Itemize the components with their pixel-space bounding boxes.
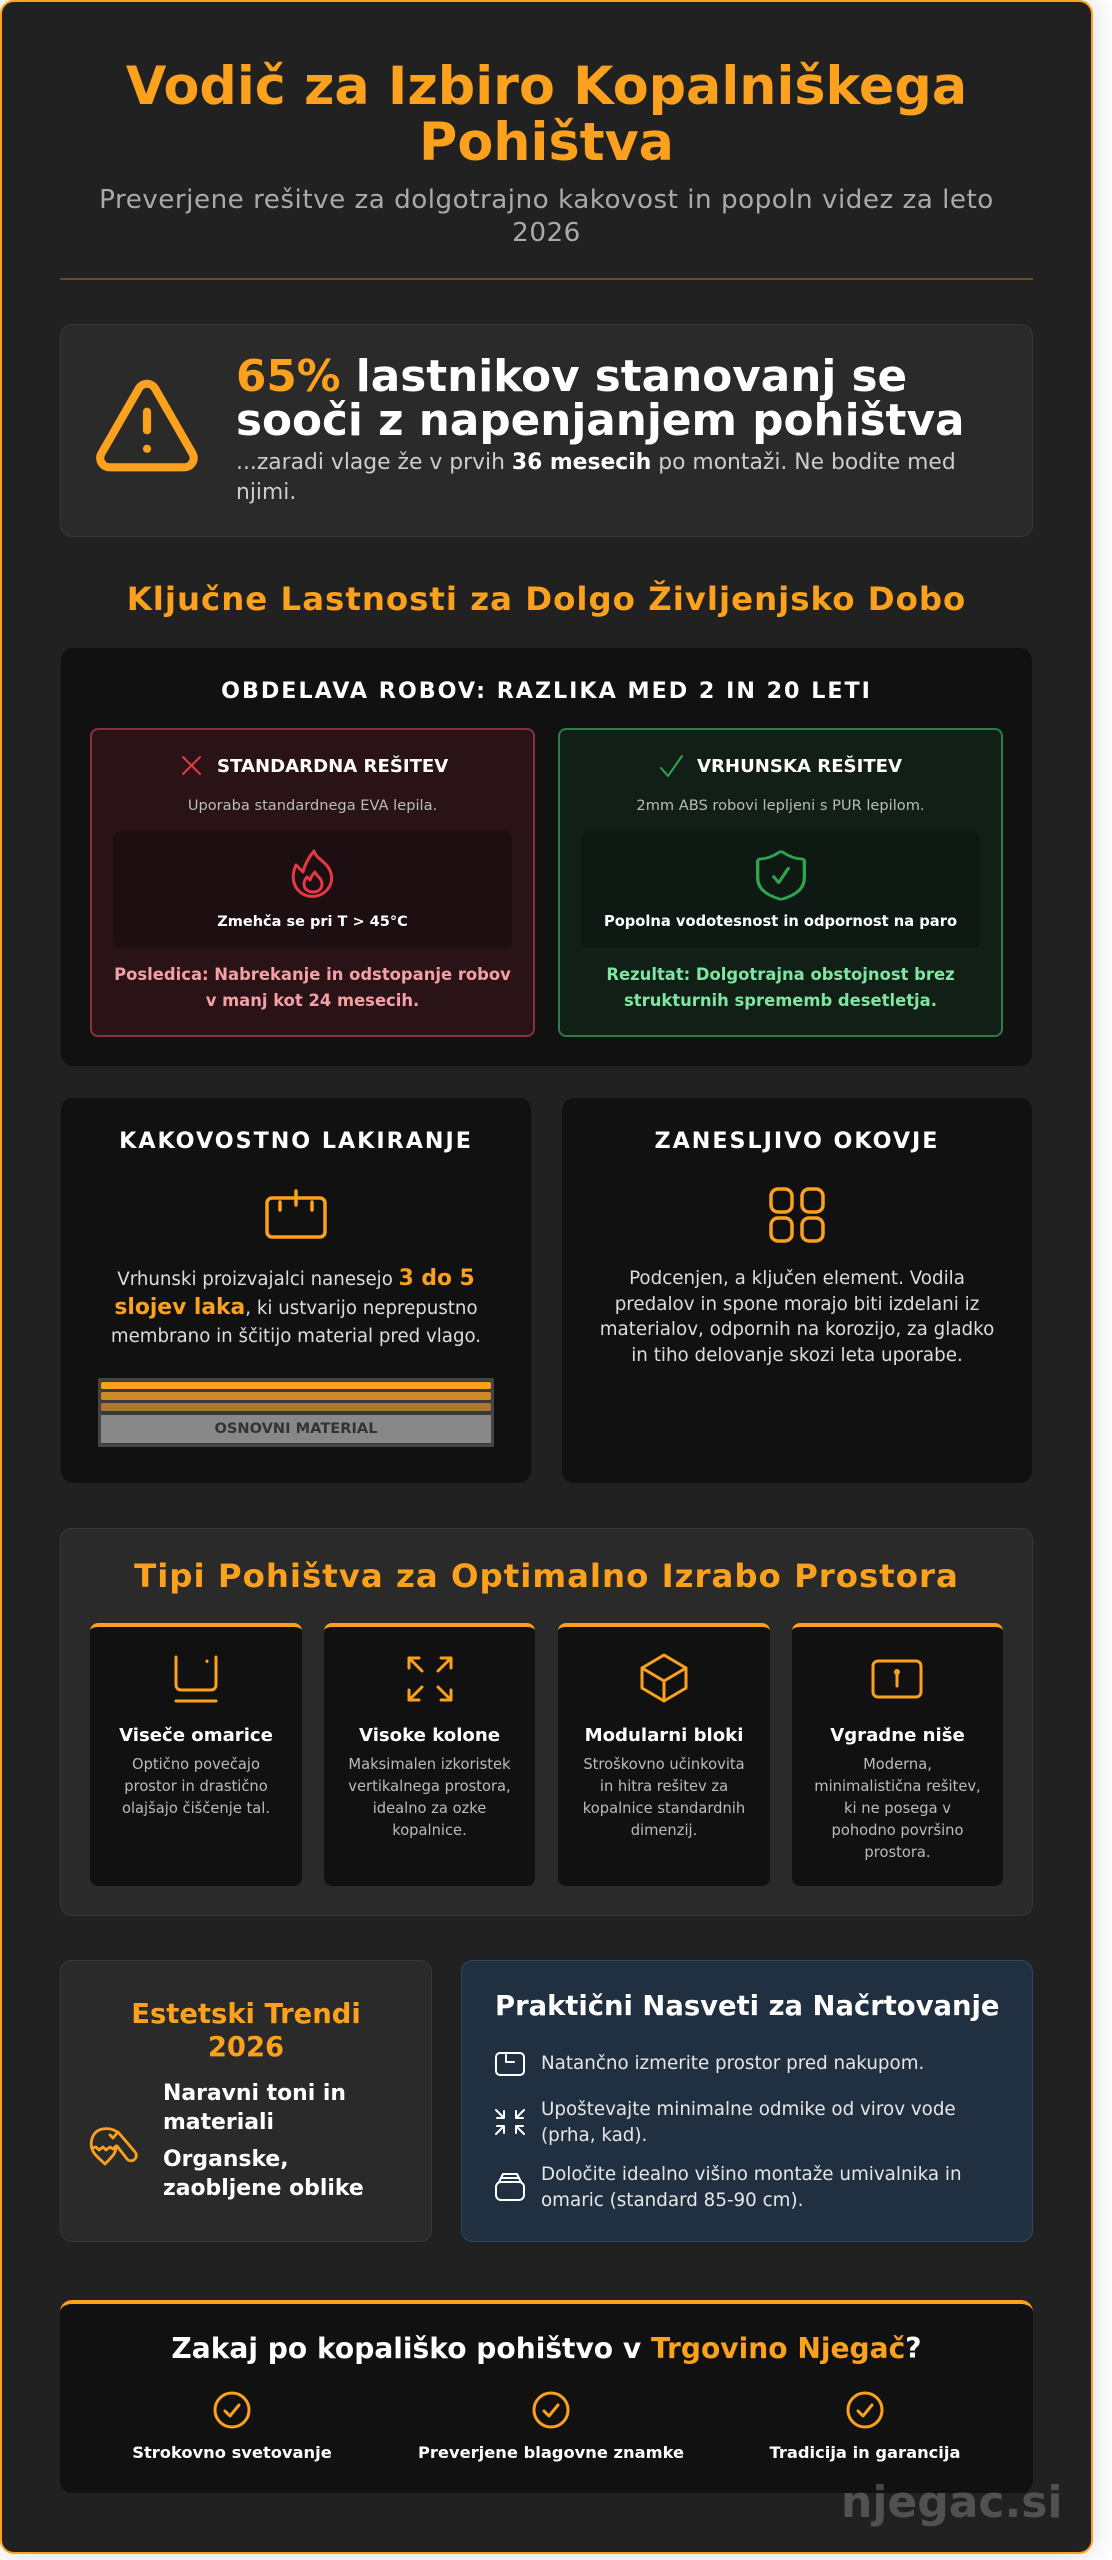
inner box: softening [113,831,512,948]
heading: furniture types: Tipi Pohištva za Optimalno Izrabo Prostora [134,1557,959,1595]
tall columns title: Visoke kolone [359,1725,500,1746]
tip 2: Upoštevajte minimalne odmike od virov vode [541,2099,956,2120]
benefit 2 [418,2392,684,2462]
title [126,56,967,173]
watermark: njegac.si [841,2477,1063,2528]
niches text: Moderna, [863,1756,932,1773]
heading: trends: Estetski Trendi [131,1999,361,2030]
tall columns text [348,1756,511,1839]
panel: lacquering [61,1098,531,1483]
title: Pohištva [419,112,674,173]
modular text: dimenzij. [631,1822,697,1839]
standard consequence [114,965,511,1010]
niches text: prostora. [864,1844,931,1861]
inner box: waterproof [581,831,980,948]
tip 3 [541,2164,962,2210]
hardware text [600,1268,994,1366]
heading: trends: 2026 [208,2032,284,2063]
icon: cube [640,1654,688,1702]
panel: trends [60,1960,432,2242]
icon: cross [182,756,201,775]
stat headline: 65% lastnikov stanovanj se [236,351,907,402]
hardware text: Podcenjen, a ključen element. Vodila [629,1268,965,1289]
icon: expand arrows [407,1656,453,1702]
heading: why us: Zakaj po kopališko pohištvo v Trgovino Njegač? [171,2332,922,2365]
hardware text: materialov, odpornih na korozijo, za gladko [600,1319,994,1340]
icon: check [660,755,683,777]
card: built-in niches [792,1623,1003,1886]
premium result: strukturnih sprememb desetletja. [624,991,937,1010]
card: modular blocks [558,1623,770,1886]
panel: hardware [562,1098,1032,1483]
base material: OSNOVNI MATERIAL [214,1420,378,1437]
card: wall cabinets [90,1623,302,1886]
stat headline: sooči z napenjanjem pohištva [236,395,964,446]
wall cabinet text: prostor in drastično [124,1778,268,1795]
icon: flame [292,849,334,898]
heading: planning tips: Praktični Nasveti za Načrtovanje [495,1991,999,2022]
tip 3: Določite idealno višino montaže umivalnika in [541,2164,962,2185]
waterproof caption: Popolna vodotesnost in odpornost na paro [604,913,957,930]
tip 3: omaric (standard 85-90 cm). [541,2190,803,2210]
tip 2: (prha, kad). [541,2124,647,2146]
icon: stacked cabinet [495,2173,525,2201]
niches text: pohodno površino [832,1822,963,1839]
modular text [583,1756,745,1839]
modular text: in hitra rešitev za [600,1778,728,1795]
wall cabinet text [122,1756,270,1817]
benefit label: Strokovno svetovanje [132,2443,332,2462]
tip 2 [541,2099,956,2146]
heading: trends [131,1999,361,2063]
tall columns text: vertikalnega prostora, [348,1778,511,1795]
icon: niche [872,1660,922,1698]
panel: why us [60,2300,1033,2493]
standard consequence: Posledica: Nabrekanje in odstopanje robov [114,965,511,984]
modular text: kopalnice standardnih [583,1800,745,1817]
wall cabinet title: Viseče omarice [119,1725,273,1746]
benefit label: Preverjene blagovne znamke [418,2443,684,2462]
subtitle [99,185,994,248]
tall columns text: kopalnice. [392,1822,467,1839]
icon: wall cabinet [174,1656,218,1702]
softening caption: Zmehča se pri T > 45°C [217,914,408,930]
wall cabinet text: Optično povečajo [132,1756,260,1773]
premium result: Rezultat: Dolgotrajna obstojnost brez [606,965,955,984]
trend list: zaobljene oblike [163,2176,364,2201]
hardware text: predalov in spone morajo biti izdelani iz [615,1294,979,1315]
lacquer text: slojev laka, ki ustvarijo neprepustno [114,1295,478,1320]
panel: furniture types [60,1528,1033,1916]
base material [101,1415,491,1443]
icon: check circle [214,2392,250,2428]
lacquer text [111,1266,481,1347]
stat detail [236,450,956,505]
heading: hardware: ZANESLJIVO OKOVJE [655,1128,939,1154]
modular title: Modularni bloki [585,1725,743,1746]
niches text: minimalistična rešitev, [814,1778,981,1795]
heading: edge finishing: OBDELAVA ROBOV: RAZLIKA MED 2 IN 20 LETI [221,678,872,704]
wall cabinet text: olajšajo čiščenje tal. [122,1800,270,1817]
standard consequence: v manj kot 24 mesecih. [206,991,419,1010]
title: Vodič za Izbiro Kopalniškega [126,56,967,117]
trend list: Naravni toni in [163,2081,346,2106]
modular text: Stroškovno učinkovita [583,1756,745,1773]
tall columns text: idealno za ozke [373,1800,486,1817]
icon: check circle [846,2392,884,2428]
lacquer text: Vrhunski proizvajalci nanesejo 3 do 5 [117,1266,475,1291]
niches text: ki ne posega v [844,1800,951,1817]
layer 2 [101,1392,491,1400]
stat detail: ...zaradi vlage že v prvih 36 mesecih po montaži. Ne bodite med [236,450,956,475]
tip 1: Natančno izmerite prostor pred nakupom. [541,2053,924,2074]
heading: lacquering: KAKOVOSTNO LAKIRANJE [119,1128,473,1154]
niches text [814,1756,981,1861]
stat detail: njimi. [236,480,296,505]
lacquer layers diagram [98,1378,494,1447]
standard description: Uporaba standardnega EVA lepila. [188,797,437,814]
card: tall columns [324,1623,535,1886]
icon: ruler box [495,2052,525,2076]
tall columns text: Maksimalen izkoristek [348,1756,511,1773]
icon: check circle [532,2392,570,2428]
benefit 1 [132,2392,332,2462]
standard heading: STANDARDNA REŠITEV [217,756,448,777]
trend list [163,2081,364,2201]
premium result [606,965,955,1010]
icon: compress arrows [495,2109,525,2135]
icon: brush [90,2127,138,2166]
icon: shield check [756,850,806,901]
layer 3 [101,1403,491,1411]
stat panel [60,324,1033,537]
subtitle: 2026 [512,218,581,248]
panel: edge finishing [61,648,1032,1066]
panel: planning tips [461,1960,1033,2242]
niches title: Vgradne niše [830,1725,965,1746]
benefit 3 [770,2392,960,2462]
benefit label: Tradicija in garancija [770,2443,960,2462]
subtitle: Preverjene rešitve za dolgotrajno kakovost in popoln videz za leto [99,185,994,215]
card: standard solution [90,728,535,1037]
lacquer text: membrano in ščitijo material pred vlago. [111,1326,481,1347]
premium description: 2mm ABS robovi lepljeni s PUR lepilom. [636,797,925,814]
layer 1 [101,1382,491,1389]
icon: lacquer box [265,1189,327,1239]
icon: four rounded squares [769,1187,825,1243]
hardware text: in tiho delovanje skozi leta uporabe. [631,1345,963,1366]
card: premium solution [558,728,1003,1037]
stat headline [236,351,964,446]
section heading: key features: Ključne Lastnosti za Dolgo Življenjsko Dobo [127,580,966,618]
trend list: materiali Organske, [163,2110,289,2172]
premium heading: VRHUNSKA REŠITEV [697,756,902,777]
icon: warning triangle [96,380,198,472]
